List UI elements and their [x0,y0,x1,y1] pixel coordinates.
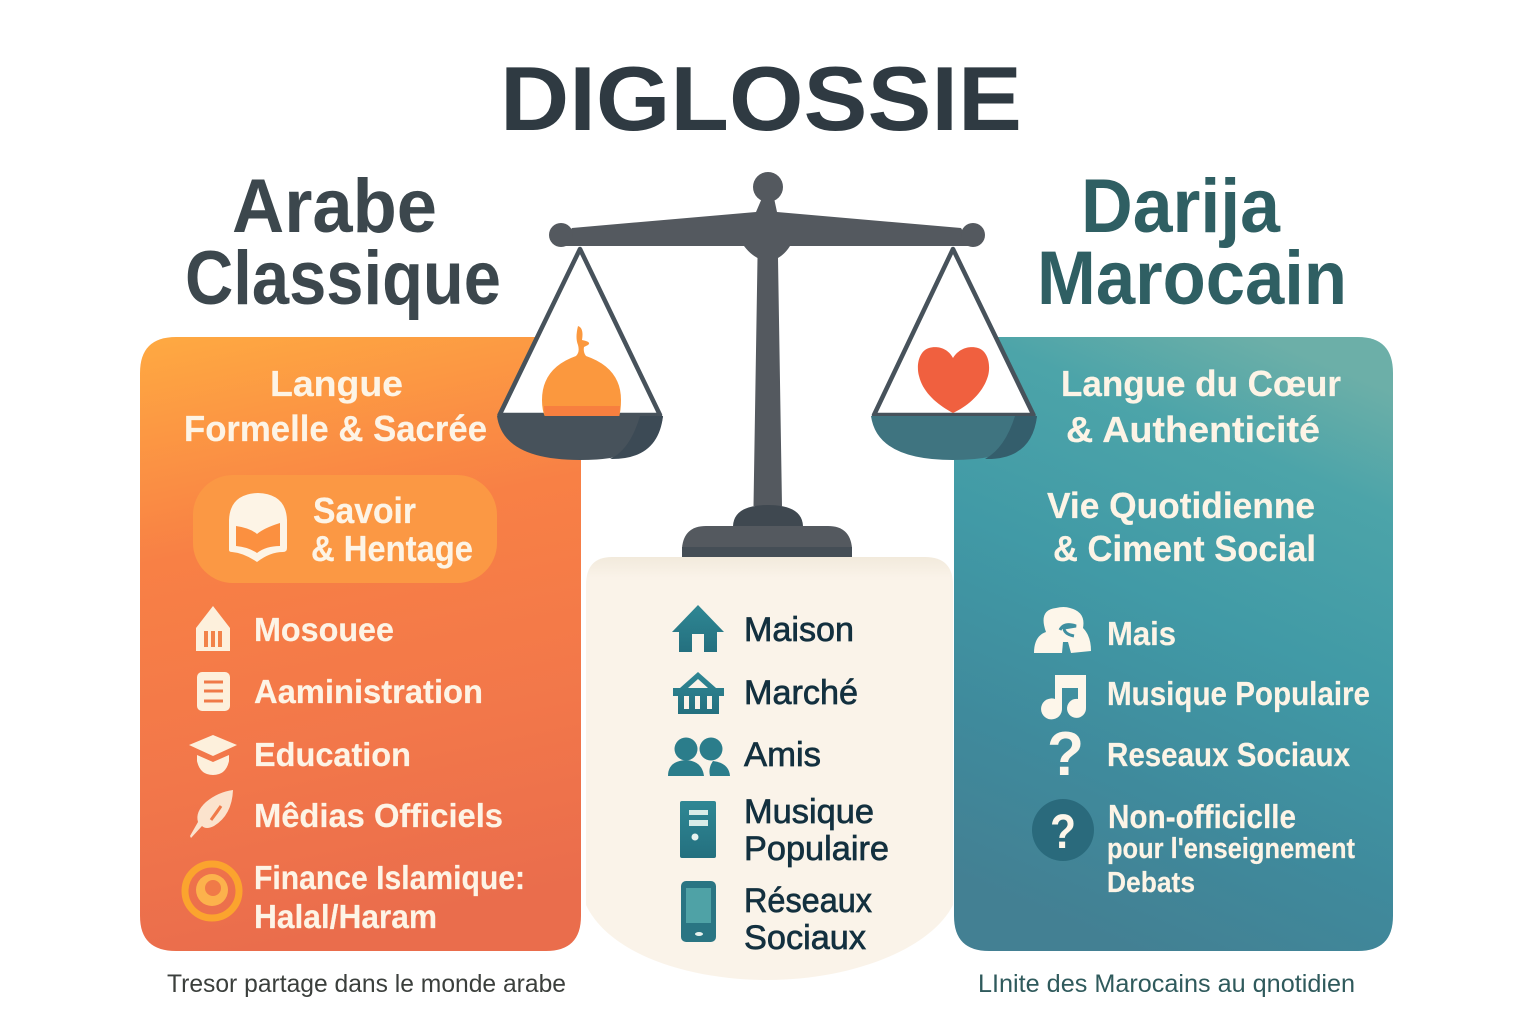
item: Marche: Marché [744,674,858,712]
caption right: LInite des Marocains au qnotidien [978,970,1355,998]
item: Non-officielle: ? [1050,806,1076,859]
heading: Darija Marocain: Darija [1081,164,1281,249]
icon: book dome [229,493,287,562]
item: Non-officielle [1032,798,1355,899]
balance scale [497,172,1037,557]
text: Savoir & Hentage: & Hentage [311,528,473,569]
panel heading left: Langue [270,363,403,404]
item: Non-officielle: pour l'enseignement [1107,833,1355,865]
heading: Darija Marocain: Marocain [1037,236,1347,321]
item: Mosquee [196,606,394,651]
panel heading right [1061,363,1341,450]
icon: heart [918,347,989,413]
item: Marche [673,672,858,714]
item: Musique Populaire [1041,675,1370,719]
base [682,505,852,557]
item: Reseaux Sociaux: Reseaux Sociaux [1107,736,1351,773]
panel heading left [184,363,487,449]
subheading: Vie Quotidienne: Vie Quotidienne [1047,485,1315,526]
panel heading right: & Authenticité [1066,409,1320,450]
item: Mosquee: Mosouee [254,611,394,648]
item: Non-officielle: Debats [1107,867,1195,899]
item: Reseaux Sociaux: Sociaux [744,919,866,957]
panel: middle background [586,557,953,980]
panel: Arabe Classique [140,337,581,951]
callout: Savoir & Hentage [193,475,497,583]
heading: Darija Marocain [1037,164,1347,321]
heading: Arabe Classique: Classique [185,236,501,321]
item: Non-officielle: Non-officiclle [1108,798,1296,835]
item: Medias Officiels [190,790,503,838]
item: Reseaux Sociaux: ? [1047,720,1084,789]
left pan [497,249,663,460]
text: Savoir & Hentage [311,490,473,569]
item: Mais [1034,607,1176,653]
item: Medias Officiels: Mêdias Officiels [254,797,503,834]
middle list [668,605,889,957]
right pan [871,249,1037,460]
item: Administration: Aaministration [254,673,483,710]
panel heading right: Langue du Cœur [1061,363,1341,404]
title: DIGLOSSIE [500,49,1022,150]
icon: dome [542,326,621,417]
panel: Darija Marocain [954,337,1393,951]
item: Reseaux Sociaux [1047,720,1351,789]
item: Musique Populaire: Populaire [744,830,889,868]
item: Maison [672,605,854,652]
item: Mais: Mais [1107,615,1176,652]
item: Reseaux Sociaux: Réseaux [744,882,872,920]
item: Amis [668,736,821,776]
item: Finance Islamique: Halal/Haram [254,898,437,935]
item: Education: Education [254,736,411,773]
item: Finance Islamique: Finance Islamique: [254,859,525,896]
subheading: Vie Quotidienne [1047,485,1316,569]
panel heading left: Formelle & Sacrée [184,408,487,449]
caption left: Tresor partage dans le monde arabe [167,970,566,998]
item: Musique Populaire: Musique Populaire [1107,675,1370,712]
heading: Arabe Classique [185,164,501,321]
item: Education [189,735,411,775]
item: Reseaux Sociaux [681,881,872,957]
text: Savoir & Hentage: Savoir [313,490,416,531]
item: Maison: Maison [744,611,854,649]
item: Musique Populaire: Musique [744,793,874,831]
item: Amis: Amis [744,736,821,774]
heading: Arabe Classique: Arabe [232,164,437,249]
subheading: Vie Quotidienne: & Ciment Social [1053,528,1316,569]
beam and column [549,172,985,506]
item: Musique Populaire [680,793,889,868]
item: Finance Islamique [185,859,525,935]
